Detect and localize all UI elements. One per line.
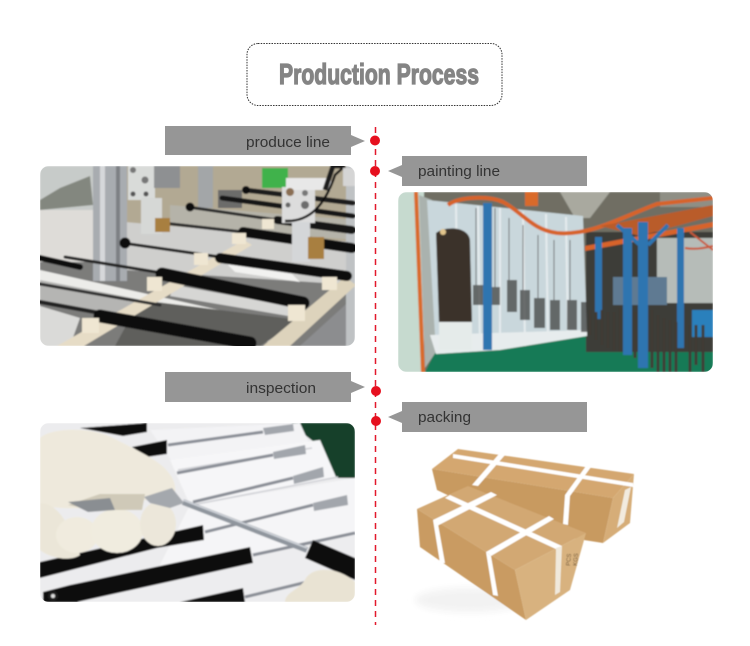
label: painting line bbox=[388, 156, 587, 186]
timeline dot: produce line bbox=[370, 136, 380, 146]
photo: inspection of gas struts with gloved hand bbox=[40, 423, 355, 602]
cream blocks bbox=[82, 219, 337, 333]
belts bbox=[57, 240, 252, 346]
back box bbox=[432, 449, 634, 543]
title: Production Process bbox=[279, 59, 479, 91]
inspected rod bbox=[183, 502, 307, 550]
doorway bbox=[436, 228, 472, 323]
gripper right bbox=[282, 187, 315, 223]
rods bbox=[168, 432, 355, 597]
glove bbox=[40, 430, 175, 508]
title box bbox=[247, 44, 502, 106]
metal clevis in hand bbox=[68, 498, 115, 512]
black cylinders bbox=[40, 423, 253, 602]
timeline dot: painting line bbox=[370, 166, 380, 176]
label: inspection bbox=[165, 372, 365, 402]
clevis ends bbox=[263, 424, 348, 511]
glove second hand bbox=[285, 570, 355, 602]
photo: packed cardboard boxes bbox=[415, 449, 634, 620]
label: packing bbox=[388, 402, 587, 432]
label: produce line: produce line bbox=[246, 134, 330, 151]
hangers on the line bbox=[476, 208, 570, 300]
label: inspection: inspection bbox=[246, 380, 316, 397]
straps on front box bbox=[445, 495, 562, 550]
timeline dot: inspection bbox=[371, 386, 381, 396]
label: packing: packing bbox=[418, 409, 471, 426]
racks bbox=[590, 308, 703, 372]
photo: painting line spray booth bbox=[398, 192, 713, 372]
right dark zone bbox=[586, 232, 713, 352]
label: produce line bbox=[165, 126, 365, 155]
front box: KGS bbox=[573, 553, 580, 566]
timeline: red dashed line bbox=[374, 127, 376, 625]
gripper left bbox=[128, 166, 155, 200]
blue columns bbox=[483, 203, 684, 368]
struts bbox=[40, 190, 353, 343]
booth curtain bbox=[427, 200, 587, 352]
front box bbox=[417, 486, 586, 620]
columns bbox=[93, 166, 127, 281]
orange overhead track bbox=[448, 198, 713, 233]
carton text: PCS bbox=[566, 553, 573, 566]
photo: produce line conveyor with gas struts bbox=[40, 166, 356, 346]
foam trays bbox=[292, 423, 307, 436]
floor bbox=[425, 335, 713, 372]
tray shadows bbox=[178, 448, 338, 505]
timeline dot: packing bbox=[371, 416, 381, 426]
left wall bbox=[398, 192, 424, 372]
label: painting line: painting line bbox=[418, 163, 500, 180]
